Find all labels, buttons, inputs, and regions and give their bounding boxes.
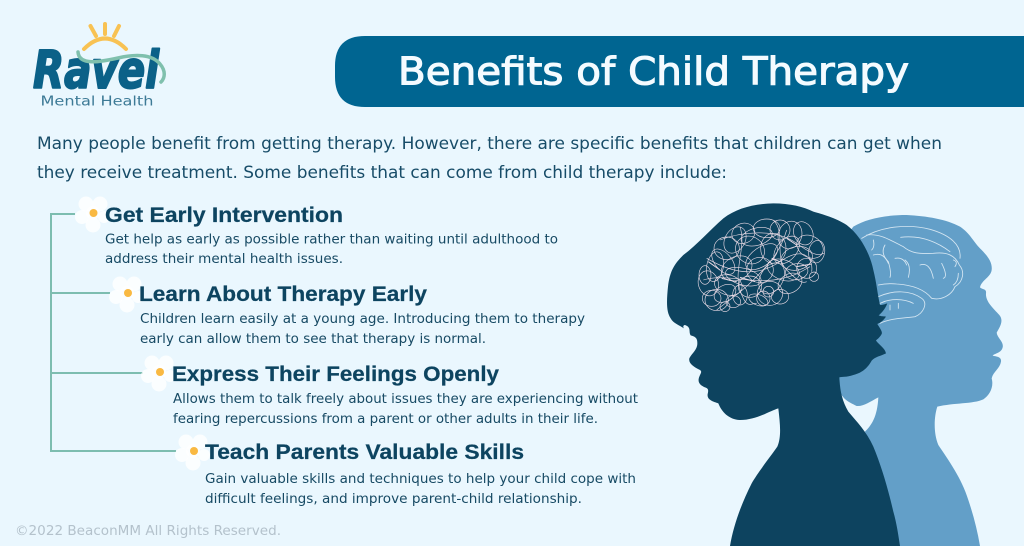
back child brain lines <box>862 226 963 323</box>
back child silhouette <box>807 215 1003 546</box>
description: Children learn easily at a young age. Introducing them to therapy <box>140 312 585 327</box>
icon: sun rays <box>84 24 126 49</box>
logo: Ravel Mental Health <box>33 24 164 110</box>
description: Allows them to talk freely about issues they are experiencing without <box>173 392 638 407</box>
icon: daisy flower <box>141 356 176 392</box>
icon: daisy flower <box>75 196 110 232</box>
front child tangled brain scribble <box>695 218 827 312</box>
benefit 3: Express Their Feelings Openly <box>141 356 638 427</box>
benefit 3: Express Their Feelings Openly: fearing repercussions from a parent or other adults in their life. <box>173 412 598 427</box>
heading: Get Early Intervention <box>105 203 343 227</box>
benefit 2: Learn About Therapy Early <box>109 276 585 347</box>
front child silhouette <box>667 203 900 546</box>
benefit 1: Get Early Intervention <box>75 196 558 267</box>
logo teal wave <box>78 52 164 82</box>
illustration: two child silhouettes with brains <box>667 203 1003 546</box>
benefit 4: Teach Parents Valuable Skills: difficult feelings, and improve parent-child relationship. <box>205 492 582 507</box>
benefit 1: Get Early Intervention: address their mental health issues. <box>105 252 343 267</box>
intro line 1: Many people benefit from getting therapy. However, there are specific benefits that children can get when <box>37 134 942 153</box>
logo tagline: Mental Health <box>40 94 154 110</box>
description: Gain valuable skills and techniques to help your child cope with <box>205 472 636 487</box>
heading: Teach Parents Valuable Skills <box>205 440 524 464</box>
title banner <box>335 36 1024 107</box>
logo wordmark: Ravel <box>33 41 160 101</box>
banner shape <box>335 36 1024 107</box>
benefit 2: Learn About Therapy Early: early can allow them to see that therapy is normal. <box>140 332 486 347</box>
icon: daisy flower <box>109 276 144 312</box>
heading: Express Their Feelings Openly <box>172 362 499 386</box>
icon: daisy flower <box>175 434 210 470</box>
intro paragraph <box>37 134 942 182</box>
description: Get help as early as possible rather than waiting until adulthood to <box>105 232 558 248</box>
heading: Learn About Therapy Early <box>139 282 427 306</box>
title: Benefits of Child Therapy <box>398 50 909 94</box>
benefit 4: Teach Parents Valuable Skills <box>175 434 636 507</box>
copyright notice: ©2022 BeaconMM All Rights Reserved. <box>15 524 281 539</box>
connector lines <box>51 214 176 451</box>
intro line 2: they receive treatment. Some benefits that can come from child therapy include: <box>37 163 727 182</box>
